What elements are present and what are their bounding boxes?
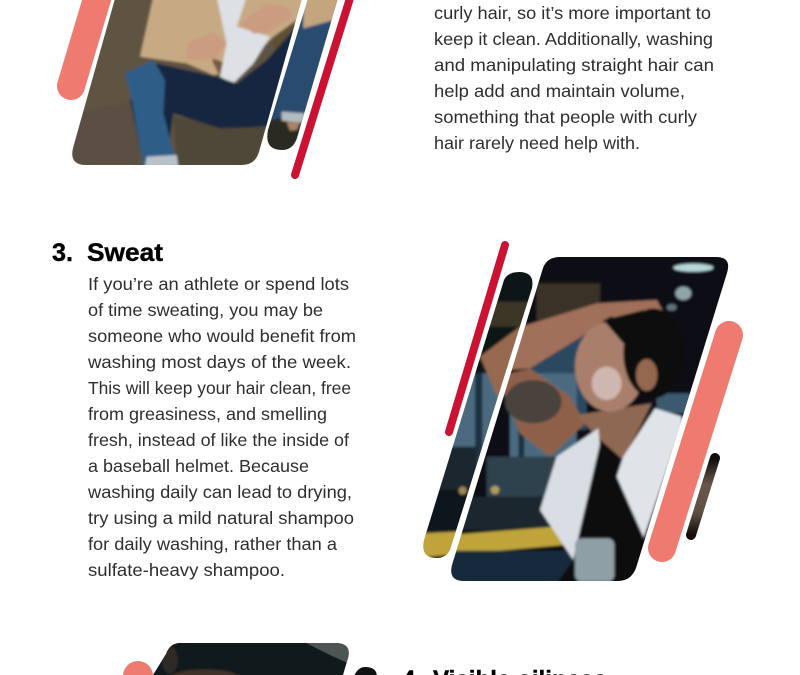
- text block: sweat paragraph: try using a mild natural shampoo: [88, 508, 354, 528]
- text block: straight hair paragraph: and manipulating straight hair can: [434, 55, 714, 75]
- photo group: athlete with towel: [410, 245, 737, 590]
- text block: sweat paragraph: someone who would benefit from: [88, 326, 356, 346]
- text block: sweat paragraph: This will keep your hair clean, free: [88, 378, 351, 398]
- heading: 3. Sweat: [52, 239, 164, 267]
- text block: straight hair paragraph: help add and maintain volume,: [434, 81, 685, 101]
- photo: seated man main panel: [72, 0, 302, 165]
- photo: seated man side strip: [267, 0, 338, 150]
- text block: sweat paragraph: from greasiness, and smelling: [88, 404, 327, 424]
- photo group: seated man in jacket and jeans: [60, 0, 360, 175]
- photo: athlete main panel: [443, 250, 737, 590]
- accent bar: salmon: [662, 335, 729, 548]
- text block: sweat paragraph: a baseball helmet. Because: [88, 456, 309, 476]
- text block: sweat paragraph: If you’re an athlete or spend lots: [88, 274, 349, 294]
- text block: straight hair paragraph: keep it clean. Additionally, washing: [434, 29, 713, 49]
- accent bar: red: [295, 0, 351, 175]
- photo: portrait main panel: [153, 643, 349, 675]
- accent bar: red: [449, 245, 505, 432]
- text block: sweat paragraph: sulfate-heavy shampoo.: [88, 560, 285, 580]
- text block: sweat paragraph: of time sweating, you may be: [88, 300, 323, 320]
- text block: straight hair paragraph: hair rarely need help with.: [434, 133, 640, 153]
- text block: sweat paragraph: washing most days of the week.: [87, 352, 351, 372]
- photo: small tattoo strip: [691, 458, 715, 535]
- heading: 3. Sweat: Sweat: [87, 239, 164, 267]
- text block: sweat paragraph: washing daily can lead to drying,: [87, 482, 352, 502]
- photo group: portrait partly visible: [123, 640, 377, 675]
- text block: straight hair paragraph: something that people with curly: [434, 107, 697, 127]
- text block: sweat paragraph: for daily washing, rather than a: [88, 534, 337, 554]
- text block: sweat paragraph: [87, 274, 356, 580]
- text block: sweat paragraph: fresh, instead of like the inside of: [88, 430, 349, 450]
- accent bar: salmon: [71, 0, 102, 86]
- text block: straight hair paragraph: [434, 3, 714, 153]
- photo: athlete left strip: [423, 272, 532, 558]
- photo: portrait dark strip: [352, 667, 377, 675]
- heading: 3. Sweat: 3.: [52, 239, 73, 267]
- accent bar: salmon: [123, 661, 153, 675]
- text block: straight hair paragraph: curly hair, so it’s more important to: [434, 3, 711, 23]
